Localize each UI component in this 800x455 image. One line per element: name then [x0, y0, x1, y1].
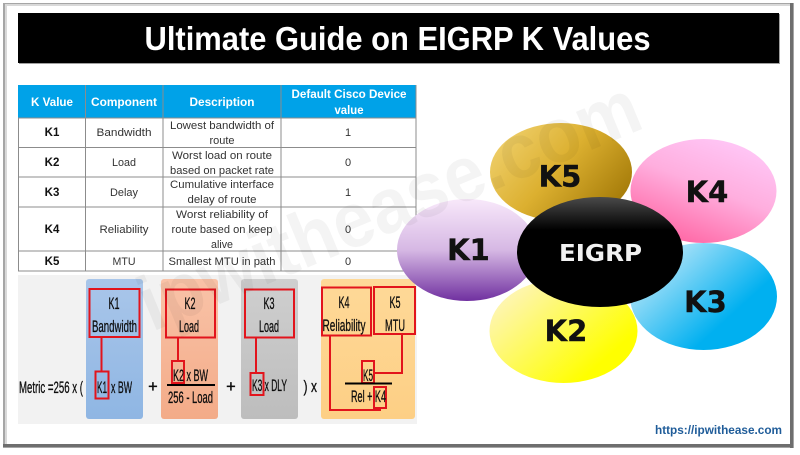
closing bracket and multiply: ) [304, 378, 308, 396]
panel: K2 load: K2 [184, 295, 196, 313]
panel: K4 and K5 [321, 279, 415, 419]
panel: K2 load: 256 - Load [168, 389, 213, 407]
row K1: Bandwidth [96, 127, 152, 139]
panel: K4 and K5: Rel + K4 [351, 388, 386, 406]
panel: K2 load [161, 279, 218, 419]
title banner [18, 13, 780, 64]
row K3: Delay [110, 187, 138, 199]
panel: K2 load: Load [179, 318, 199, 336]
panel: K3 delay: Load [259, 318, 279, 336]
row K2 [45, 150, 351, 177]
row K4: Reliability [100, 224, 149, 236]
title banner: Ultimate Guide on EIGRP K Values [144, 20, 650, 57]
row K3: delay of route [188, 194, 256, 206]
flower diagram [397, 123, 777, 383]
table header: K Value [31, 95, 73, 109]
table header: Component [91, 95, 157, 109]
row K1 [45, 120, 351, 147]
panel: K1 bandwidth [86, 279, 143, 419]
watermark: ipwithease.com [125, 62, 653, 348]
panel: K2 load: K2 x BW [173, 367, 208, 385]
petal K2: K2 [545, 314, 587, 348]
row K2: based on packet rate [170, 165, 274, 177]
petal K2 [490, 279, 638, 383]
panel: K3 delay [241, 279, 298, 419]
row K3: 1 [345, 187, 351, 199]
panel: K1 bandwidth: Bandwidth [92, 318, 137, 336]
panel: K3 delay: K3 [264, 295, 274, 313]
petal K4 [630, 139, 776, 243]
row K1: Lowest bandwidth of [170, 120, 275, 132]
center EIGRP [517, 197, 683, 307]
row K5: K5 [45, 256, 60, 268]
table header [18, 85, 416, 118]
petal K3 [630, 243, 777, 350]
panel: K4 and K5: Reliability [322, 317, 366, 335]
table header: value [334, 103, 364, 117]
metric formula [18, 275, 417, 424]
row K4: 0 [345, 224, 351, 236]
panel: K4 and K5: K5 [390, 294, 400, 312]
panel: K4 and K5: K4 [338, 294, 350, 312]
row K4: route based on keep [172, 224, 272, 236]
plus sign: + [148, 378, 158, 396]
row K3 [45, 179, 351, 206]
row K5: MTU [112, 256, 136, 268]
closing bracket and multiply: x [311, 378, 318, 396]
petal K5: K5 [539, 160, 581, 194]
formula prefix: Metric =256 x ( [19, 379, 83, 397]
panel: K1 bandwidth: K1 [108, 295, 120, 313]
row K4: K4 [45, 224, 60, 236]
panel: K4 and K5: MTU [385, 317, 405, 335]
petal K1 [397, 199, 537, 301]
row K3: Cumulative interface [170, 179, 274, 191]
row K3: K3 [45, 187, 59, 199]
panel: K4 and K5: K5 [363, 367, 373, 385]
plus sign: + [226, 378, 236, 396]
source url: https://ipwithease.com [655, 425, 782, 437]
row K4: Worst reliability of [176, 209, 269, 221]
panel: K1 bandwidth: K1 [97, 379, 107, 397]
petal K5 [490, 123, 632, 221]
table: K values [18, 85, 416, 271]
row K2: Load [112, 157, 136, 169]
row K4: alive [211, 239, 233, 251]
petal K3: K3 [684, 285, 727, 319]
row K1: 1 [345, 127, 351, 139]
row K2: Worst load on route [172, 150, 272, 162]
row K5: Smallest MTU in path [168, 256, 276, 268]
row K1: route [210, 135, 234, 147]
row K4 [45, 209, 351, 251]
row K5 [45, 256, 351, 268]
panel: K3 delay: K3 x DLY [252, 377, 287, 395]
row K1: K1 [45, 127, 60, 139]
table header: Default Cisco Device [292, 87, 407, 101]
row K5: 0 [345, 256, 351, 268]
row K2: 0 [345, 157, 351, 169]
row K2: K2 [45, 157, 59, 169]
closing bracket and multiply [304, 378, 318, 396]
panel: K1 bandwidth: x BW [111, 379, 132, 397]
petal K4: K4 [686, 175, 728, 209]
table header: Description [190, 95, 254, 109]
center EIGRP: EIGRP [559, 241, 642, 267]
petal K1: K1 [447, 233, 490, 267]
